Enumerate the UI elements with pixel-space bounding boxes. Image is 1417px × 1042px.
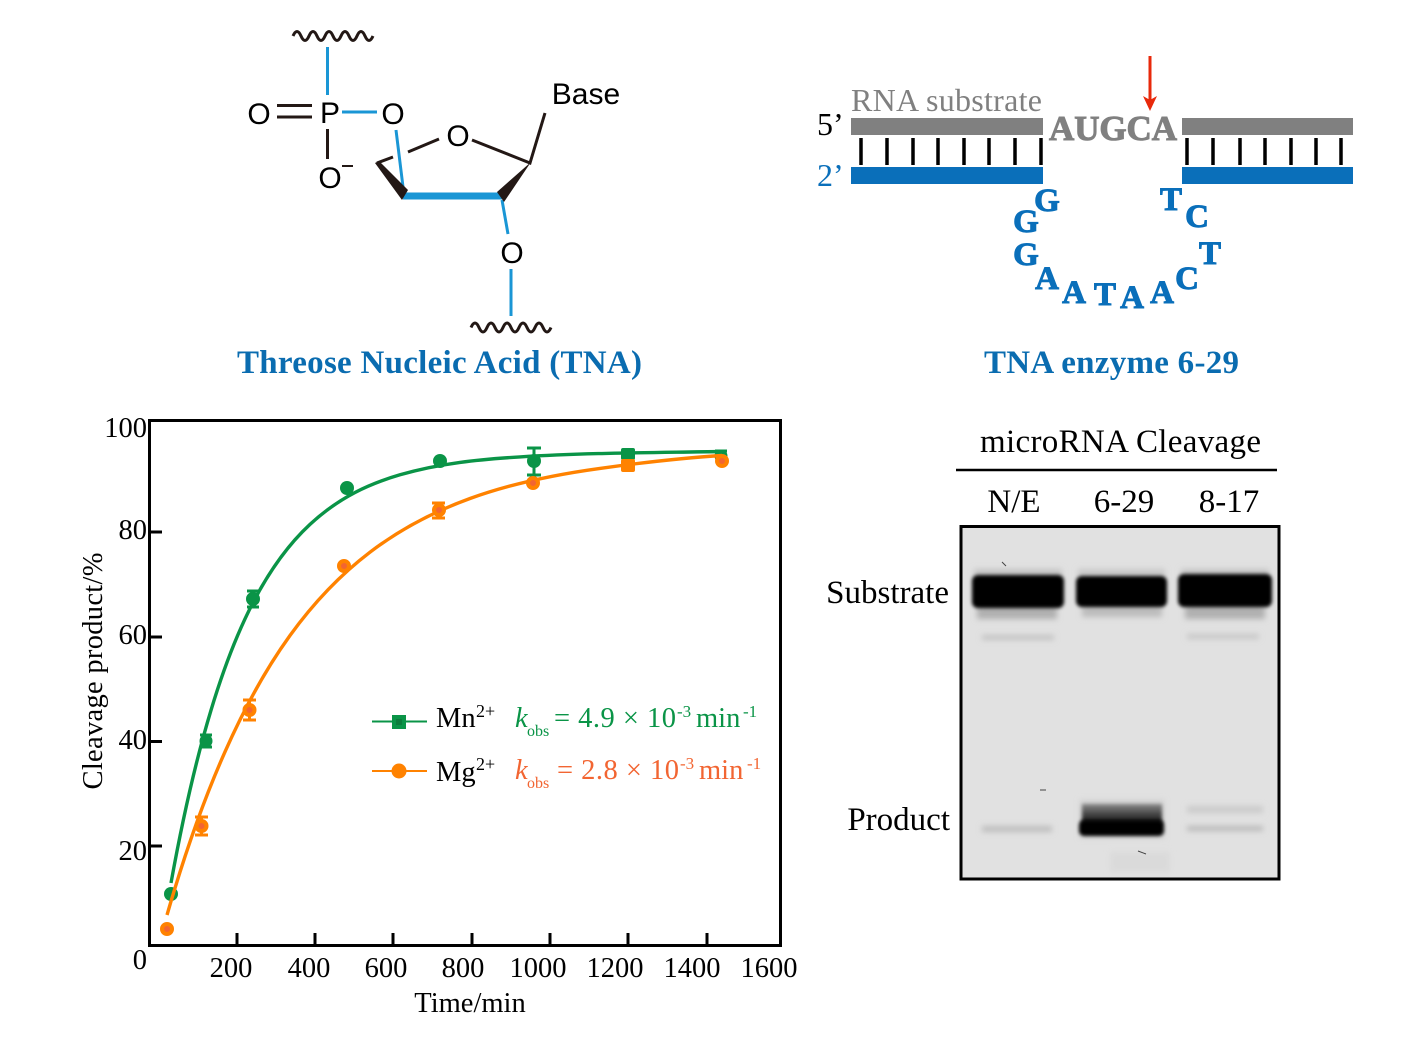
legend: Mn: -1 (743, 702, 757, 721)
specks (1002, 562, 1146, 854)
row label: Substrate: Substrate (826, 575, 949, 611)
heading rule (956, 469, 1277, 471)
legend: Mg: = 2.8 × 10 (557, 755, 679, 786)
atom labels: O (318, 162, 342, 195)
catalytic loop letters: C (1185, 199, 1209, 235)
wavy line: top (293, 32, 373, 40)
catalytic loop letters: A (1062, 275, 1086, 311)
label: 2 prime: 2’ (817, 157, 844, 193)
legend: Mg: k (515, 755, 529, 786)
y axis labels: 60 (118, 620, 147, 651)
y axis labels: 80 (118, 515, 147, 546)
negative charge (342, 165, 353, 167)
legend: Mn: 2+ (476, 701, 495, 721)
title: Threose Nucleic Acid: Threose Nucleic Acid (TNA) (237, 345, 642, 381)
atom labels: O (500, 237, 524, 270)
y axis labels: 40 (118, 725, 147, 756)
y axis labels: 100 (104, 413, 147, 444)
gel heading: microRNA Cleavage (980, 424, 1261, 460)
legend: Mn: Mn (436, 703, 476, 734)
arrow: cleavage site (1143, 56, 1157, 111)
legend: Mn: obs (527, 723, 549, 740)
axis ticks (150, 532, 707, 945)
legend: Mg: 2+ (476, 754, 495, 774)
wedge bonds (375, 161, 531, 202)
y axis title: Cleavage product/% (78, 552, 109, 790)
legend: Mg: min (699, 755, 743, 786)
lane labels (987, 484, 1259, 520)
Mg data points (162, 456, 727, 934)
panel: kinetics chart (78, 413, 798, 1019)
panel: TNA chemical structure (237, 32, 642, 381)
atom labels (247, 78, 620, 270)
product smear (1082, 804, 1162, 824)
substrate strand (851, 118, 1353, 135)
catalytic loop letters: G (1013, 237, 1039, 273)
panel: TNA enzyme diagram (817, 56, 1353, 381)
x axis labels: 1000 (510, 953, 566, 984)
faint halos (974, 569, 1269, 872)
x axis labels: 1400 (664, 953, 720, 984)
y axis labels: 20 (118, 836, 147, 867)
x axis labels: 1600 (740, 953, 798, 984)
x axis title: Time/min (414, 988, 526, 1019)
catalytic loop letters: A (1035, 261, 1059, 297)
atom labels: O (381, 98, 405, 131)
chart frame (150, 420, 780, 946)
row label: Product: Product (847, 802, 950, 838)
legend (372, 701, 761, 792)
x axis labels (210, 953, 798, 984)
catalytic loop letters: A (1120, 280, 1144, 316)
enzyme strand (851, 167, 1353, 184)
y axis labels (104, 413, 147, 976)
legend: Mg (372, 754, 761, 792)
legend: Mn: min (696, 703, 740, 734)
panel: gel (826, 424, 1279, 879)
catalytic loop letters: A (1150, 275, 1174, 311)
lane labels: N/E (987, 484, 1041, 520)
x axis labels: 1200 (586, 953, 644, 984)
blue backbone bonds (328, 47, 511, 316)
Mn curve (171, 452, 721, 883)
catalytic loop letters: C (1175, 261, 1199, 297)
x axis labels: 400 (288, 953, 330, 984)
catalytic loop letters: T (1199, 236, 1221, 272)
x axis labels: 600 (365, 953, 407, 984)
thick blue bond (403, 192, 502, 200)
catalytic loop letters: G (1013, 204, 1039, 240)
atom labels: O (247, 98, 271, 131)
gel frame (961, 526, 1279, 879)
atom labels: Base (552, 78, 620, 111)
catalytic loop letters: G (1034, 183, 1060, 219)
lane labels: 8-17 (1199, 484, 1259, 520)
legend: Mn (372, 701, 757, 740)
legend: Mn: = 4.9 × 10 (554, 703, 676, 734)
Mg curve (167, 456, 722, 915)
catalytic loop letters (1013, 182, 1221, 316)
base pair ticks (861, 138, 1341, 165)
legend: Mn: k (515, 703, 529, 734)
sequence: AUGCA: AUGCA (1049, 109, 1178, 148)
catalytic loop letters: T (1094, 277, 1116, 313)
black bonds (277, 106, 545, 163)
legend: Mg: -1 (747, 754, 761, 773)
lane labels: 6-29 (1094, 484, 1154, 520)
title: TNA enzyme 6-29: TNA enzyme 6-29 (984, 345, 1239, 381)
wavy line: bottom (471, 323, 551, 332)
label: 5 prime: 5’ (817, 106, 844, 142)
legend: Mg: -3 (680, 754, 694, 773)
gel image (961, 527, 1279, 879)
y axis labels: 0 (133, 945, 147, 976)
substrate and product bands (972, 574, 1272, 836)
Mn data points (164, 448, 728, 901)
atom labels: P (320, 97, 340, 130)
catalytic loop letters: T (1160, 182, 1182, 218)
legend: Mg: obs (527, 775, 549, 792)
atom labels: O (446, 120, 470, 153)
x axis labels: 800 (442, 953, 484, 984)
legend: Mn: -3 (677, 702, 691, 721)
label: RNA substrate: RNA substrate (851, 82, 1042, 118)
x axis labels: 200 (210, 953, 252, 984)
legend: Mg: Mg (436, 757, 476, 788)
